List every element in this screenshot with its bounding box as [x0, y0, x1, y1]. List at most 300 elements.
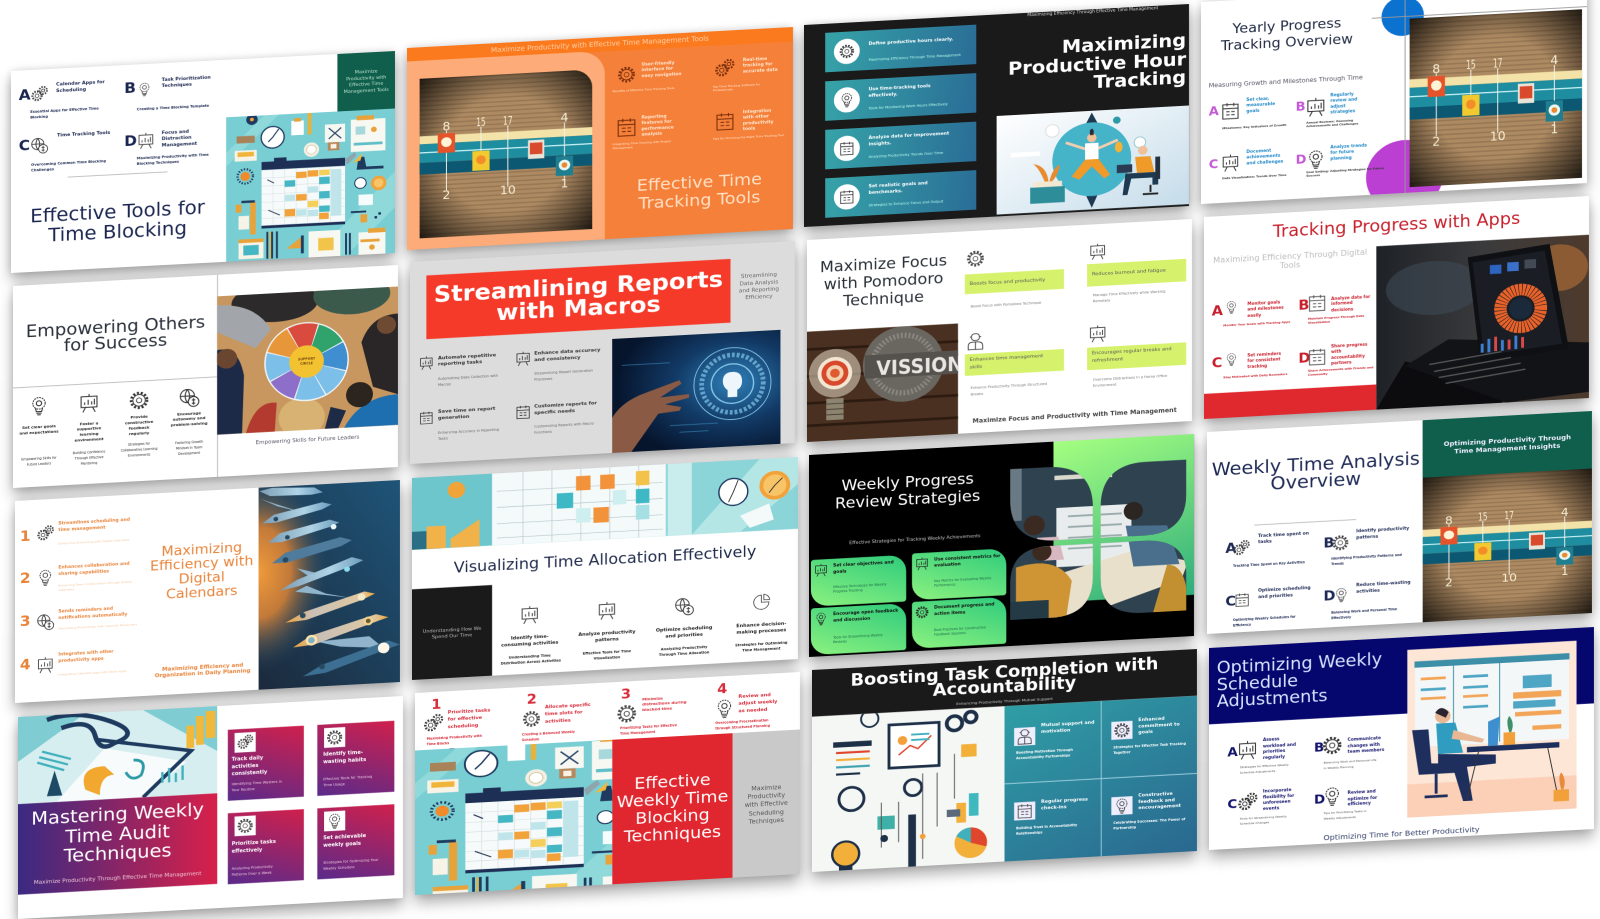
item 1: Enhancing Scheduling with Digital Calendars [58, 538, 129, 545]
item C: Schedule Changes [1240, 820, 1269, 825]
benefit 3: Enhances time management [970, 354, 1043, 363]
image: timeline [420, 70, 592, 239]
item B: Annual Reviews: Assessing [1306, 119, 1353, 125]
item A: A [19, 86, 31, 104]
side text: Efficiency [745, 294, 773, 301]
item A: easily [1247, 313, 1261, 318]
title block: Techniques [64, 839, 172, 866]
card 2 [825, 73, 976, 121]
title: Adjustments [1217, 686, 1328, 711]
item C: flexibility for [1263, 794, 1294, 800]
item 1: Macros [438, 382, 451, 387]
green block [1053, 434, 1194, 602]
card 2 [317, 721, 394, 796]
side text: and Reporting [739, 287, 779, 294]
cell 3: Relationships [1016, 830, 1043, 835]
item C: Overcoming Common Time Blocking [31, 159, 106, 167]
title: Weekly Progress [841, 469, 974, 495]
item D [1298, 342, 1380, 379]
subtitle: Measuring Growth and Milestones Through Time [1209, 74, 1363, 90]
panel: Empowering Others for Success [13, 265, 398, 488]
item 2: Enhancing Team Collaboration through Shared [58, 580, 132, 588]
item C: Data Visualization: Trends Over Time [1222, 173, 1286, 180]
item C [1225, 584, 1322, 625]
card 4: Feedback Sessions [934, 631, 966, 637]
item A: A [1225, 540, 1236, 557]
subtitle: Maximize Productivity with Effective Time Management Tools [491, 34, 709, 54]
item 4 [516, 401, 598, 435]
item 2: and consistency [534, 355, 580, 363]
cell 2: goals [1138, 730, 1153, 736]
item A: Set clear, [1246, 97, 1269, 103]
step 1: scheduling [448, 723, 478, 730]
cell 4 [1111, 789, 1193, 839]
card 3 [228, 809, 304, 884]
grey note block: with Effective [745, 800, 788, 809]
item 3 [20, 604, 145, 636]
item C: achievements [1246, 154, 1280, 161]
column 2: Through Effective [75, 455, 103, 460]
item 2 [20, 560, 145, 592]
image: calendar flat lay [226, 108, 395, 262]
step 4: adjust weekly [738, 699, 777, 707]
item B: Communicate [1348, 737, 1381, 743]
item 4 [20, 647, 145, 679]
card 4 [825, 170, 976, 218]
benefit 2: Manage Time Effectively while Working [1093, 289, 1165, 297]
card 2 [912, 548, 1006, 600]
tagline box [1423, 411, 1592, 478]
black label box [412, 585, 492, 680]
card 3: Reviews [833, 640, 847, 644]
item 2: Enhance data accuracy [534, 348, 600, 357]
header subtitle: Enhancing Productivity Through Mutual Support [956, 696, 1053, 706]
column 1: consuming activities [501, 640, 558, 648]
column 1: Understanding Time [509, 653, 551, 660]
card 4: Weekly Schedule [323, 865, 355, 871]
column 3: Environments [128, 453, 150, 458]
item A: Assess [1263, 738, 1280, 743]
card 4: benchmarks. [868, 188, 903, 196]
step 3: Prioritizing Tasks for Effective [620, 724, 677, 730]
grey note block: Scheduling [749, 808, 784, 817]
step 4: 4 [717, 680, 727, 697]
item B: B [124, 79, 136, 97]
card 3: effectively [232, 847, 262, 854]
cell 2: Together [1113, 750, 1131, 755]
cell 1: Accountability Partnerships [1016, 753, 1070, 760]
column 4: making processes [736, 627, 786, 635]
item A [1227, 736, 1309, 776]
item D: Blocking Techniques [137, 159, 179, 166]
panel: Maximizing Productive Hour Tracking [804, 4, 1189, 227]
item A: tasks [1258, 540, 1272, 545]
title: Visualizing Time Allocation Effectively [454, 543, 756, 576]
grey note block: Productivity [747, 792, 785, 801]
title: Tracking Progress with Apps [1273, 210, 1520, 242]
title: Calendars [166, 583, 237, 602]
item D: D [1298, 349, 1310, 366]
item 3: Management [613, 145, 633, 150]
column 4 [170, 388, 208, 456]
column 4: Enhance decision- [736, 621, 786, 629]
item A: and milestones [1247, 306, 1284, 313]
benefit 4: Encourages regular breaks and [1092, 347, 1172, 356]
cell 2: Strategies for Effective Task Tracking [1113, 742, 1186, 750]
item 1: interface for [641, 67, 673, 73]
cell 1: motivation [1041, 728, 1070, 735]
item D: Share Achievements with Friends and [1308, 366, 1373, 373]
column 1 [501, 602, 559, 668]
subtitle: Maximizing Efficiency Through Digital [1213, 249, 1367, 266]
item 3 [420, 406, 499, 441]
column 2: learning [80, 431, 98, 437]
side text: Streamlining [741, 273, 777, 280]
item A: Tracking Time Spent on Key Activities [1233, 560, 1305, 568]
item D: efficiency [1348, 802, 1371, 808]
card 4: Strategies for Optimizing Your [323, 857, 379, 865]
red title block: Effective [634, 770, 711, 793]
item A: regularly [1263, 755, 1285, 761]
column 1: and expectations [19, 429, 59, 436]
item 1: Streamlines scheduling and [58, 518, 130, 526]
item 4: Tips for Choosing the Right Time Tracking Tool [713, 133, 784, 141]
item 3: features for [641, 120, 672, 126]
title [820, 251, 947, 310]
item B: Maintain Progress Through Data [1308, 314, 1364, 321]
title banner: with Macros [496, 291, 661, 326]
card 3: Encourage open feedback [833, 609, 898, 617]
item 2: sharing capabilities [58, 570, 109, 577]
red title block: Weekly Time [617, 787, 728, 812]
item A: Scheduling [56, 87, 86, 94]
footer note: Organization in Daily Planning [155, 669, 251, 679]
cell 4: feedback and [1138, 797, 1175, 805]
item 2: Streamlining Report Generation [534, 368, 593, 376]
item A: Strategies for Effective Weekly [1240, 763, 1289, 769]
benefit 2: Remotely [1093, 298, 1110, 303]
cell 4: Celebrating Successes: The Power of [1113, 818, 1185, 825]
item 2: Top Time Tracking Software for [713, 83, 760, 89]
item D: Weekly Adjustments [1324, 815, 1356, 820]
benefit 2: Reduces burnout and fatigue [1092, 268, 1166, 277]
title [1217, 651, 1400, 711]
item D: Management [162, 141, 197, 148]
item B: Task Prioritization [162, 75, 211, 83]
item 3: Integrating Time Tracking with Project [613, 140, 671, 146]
item C: Efficiency [1233, 623, 1251, 627]
item B: informed [1331, 302, 1353, 307]
item A [18, 80, 105, 119]
column 2 [578, 598, 636, 664]
title [819, 469, 997, 513]
card 2: Key Metrics for Evaluating Weekly [934, 576, 991, 583]
item 1 [420, 352, 498, 387]
card 2: Performance [934, 583, 955, 587]
title: Maximizing [1062, 29, 1186, 58]
item 4: productivity apps [58, 657, 104, 664]
column 2: environment [75, 436, 104, 442]
card 1 [811, 555, 906, 607]
column 1: Distribution Across Activities [501, 657, 561, 665]
item 4: Integrates with other [58, 650, 114, 658]
item 2: Enhances collaboration and [58, 562, 130, 570]
benefit 3: skills [970, 364, 982, 370]
card 4 [317, 804, 394, 879]
subtitle: Effective Strategies for Tracking Weekly Achievements [849, 534, 981, 546]
item 4: productivity [743, 120, 774, 126]
card 2: Identify time- [323, 750, 363, 758]
cell 3: check-ins [1041, 804, 1067, 811]
red title block: Techniques [624, 822, 721, 847]
card 1: Define productive hours clearly. [868, 37, 953, 47]
column 3: Collaborative Learning [121, 447, 157, 453]
tagline box: Time Management Insights [1454, 441, 1560, 455]
step 2: time slots for [545, 710, 583, 717]
item C: unforeseen [1263, 800, 1291, 806]
title block: Mastering Weekly [31, 798, 204, 829]
item 1 [612, 60, 682, 93]
item C: C [1209, 157, 1218, 172]
item 3: analysis [641, 132, 662, 138]
column 2: Foster a [80, 421, 98, 426]
image: person at desk [1407, 641, 1577, 818]
card 3: Analyze data for improvement [868, 131, 949, 141]
cell 3: Regular progress [1041, 797, 1088, 805]
item C: C [1227, 797, 1237, 812]
item 3: Tasks [438, 436, 448, 441]
item B [1296, 92, 1358, 128]
item D [124, 129, 209, 166]
item A: A [1212, 302, 1223, 319]
navy header [1209, 627, 1594, 724]
panel: Streamlining Reports with Macros [410, 241, 795, 464]
benefit 3: Breaks [971, 391, 983, 396]
card 1: Identifying Time Wasters in [232, 779, 282, 786]
item 1: Benefits of Effective Time Tracking Tools [613, 86, 674, 93]
item 3 [612, 114, 674, 150]
step 2: activities [545, 718, 571, 725]
item B [1314, 731, 1396, 772]
panel tagline: Management Tools [344, 87, 389, 95]
item A: Monitor Your Goals with Tracking Apps [1223, 320, 1290, 327]
step 2: Schedule [522, 737, 539, 742]
title: Overview [1270, 467, 1361, 494]
card 2: evaluation [934, 563, 961, 569]
column 2: Building Confidence [73, 450, 105, 455]
subtitle: Maximizing Efficiency Through Effective Time Management [1027, 7, 1158, 18]
image: timeline [1423, 468, 1592, 622]
item A: workload and [1263, 743, 1296, 749]
title: Optimizing Weekly [1217, 650, 1382, 678]
grey note block [733, 729, 800, 878]
card 1: goals [833, 570, 847, 575]
item A: Schedule Adjustments [1240, 769, 1275, 774]
card 4: Set realistic goals and [868, 181, 928, 189]
card 4: Best Practices for Constructive [934, 626, 986, 632]
item A: A [1209, 104, 1219, 119]
benefit 3: Enhance Productivity Through Structured [971, 381, 1047, 390]
item B: team members [1348, 748, 1384, 755]
column 2: patterns [595, 636, 619, 643]
card 3: Tools for Streamlining Weekly [833, 633, 883, 640]
item 3: Save time on report [438, 406, 495, 415]
title block: Time Audit [65, 820, 170, 847]
item 2: tracking for [743, 63, 773, 69]
cell 4: Constructive [1138, 791, 1173, 799]
item 4: Functions [534, 429, 552, 435]
card 4: Strategies to Enhance Focus and Output [868, 199, 943, 207]
item B: strategies [1330, 109, 1355, 115]
title: Tracking [1093, 66, 1186, 93]
card 1: Progress Tracking [833, 589, 863, 594]
column 4: Strategies for Optimizing [735, 640, 788, 647]
benefit 4: Environment [1093, 382, 1116, 388]
image: isometric audit [18, 706, 217, 804]
benefit 1: Boosts focus and productivity [970, 277, 1045, 287]
side text [739, 272, 779, 301]
peach frame [407, 51, 605, 250]
benefit 3 [964, 333, 1064, 396]
image: bulb and vision [807, 323, 958, 442]
benefit 2 [1087, 244, 1186, 303]
step 4: Review and [738, 692, 771, 700]
card 1: Your Routine [232, 787, 255, 792]
cell 3: Building Trust in Accountability [1016, 823, 1077, 830]
item C: Challenges [31, 167, 54, 172]
item 1: time management [58, 526, 105, 533]
step 4 [713, 677, 798, 731]
card 4: action items [934, 611, 965, 617]
cell 2 [1111, 714, 1193, 763]
benefit 1: Boost Focus with Pomodoro Technique [971, 300, 1041, 308]
card 1: Effective Techniques for Weekly [833, 583, 886, 589]
title: Effective Time [637, 170, 762, 195]
item D: Balancing Work and Personal Time [1331, 608, 1397, 615]
header title: Boosting Task Completion with [851, 655, 1158, 690]
item C: events [1263, 807, 1279, 812]
title: Yearly Progress [1232, 15, 1341, 37]
item 2 [516, 348, 600, 382]
title [26, 313, 205, 356]
cell 3 [1014, 795, 1096, 844]
block subtitle: Maximize Productivity Through Effective Time Management [34, 871, 201, 886]
item 2: accurate data [743, 68, 778, 74]
item D: accountability [1331, 354, 1365, 361]
item C: C [19, 136, 30, 154]
item A: goals [1246, 109, 1259, 114]
item A [1225, 530, 1322, 571]
item D: for future [1330, 150, 1354, 156]
card 4: Document progress and [934, 603, 994, 611]
item C: Optimize scheduling [1258, 586, 1311, 594]
title: with Pomodoro [824, 269, 943, 293]
step 3: distractions during [642, 701, 687, 708]
item B: Identifying Productivity Patterns and [1331, 553, 1402, 561]
column 4: problem-solving [171, 421, 208, 427]
item C [1209, 148, 1286, 180]
item 4: specific needs [534, 408, 575, 416]
column 4: Encourage [177, 410, 201, 416]
item C [19, 130, 110, 172]
image: person balancing time [996, 106, 1189, 215]
title [1220, 15, 1353, 53]
item C: Document [1246, 149, 1271, 155]
subtitle: Tools [1280, 261, 1300, 271]
step 2: Allocate specific [545, 702, 591, 710]
item B: B [1323, 535, 1334, 551]
card 4 [912, 597, 1006, 649]
item 3: generation [438, 414, 469, 421]
item A [1212, 295, 1294, 332]
title: Digital [179, 569, 225, 587]
card 3: and discussion [833, 617, 870, 623]
panel: Effective Time Tracking Tools [407, 27, 793, 250]
item 3: notifications automatically [58, 613, 127, 621]
item C: Tools for Streamlining Weekly [1240, 814, 1287, 821]
column 3: Analyzing Productivity [661, 644, 707, 651]
item C: Time Tracking Tools [57, 130, 110, 139]
item B [1298, 290, 1380, 327]
column 3: and priorities [665, 632, 703, 639]
column 2: Mentoring [81, 461, 97, 465]
item 4: tools [743, 127, 755, 132]
footer note [150, 662, 256, 680]
item C: tracking [1247, 364, 1267, 370]
column 3 [120, 392, 158, 458]
item A: A [1227, 745, 1238, 760]
item 4: Customizing Reports with Macro [534, 421, 594, 429]
card 1: Set clear objectives and [833, 561, 894, 569]
item C: for consistent [1247, 358, 1280, 364]
item B: adjust [1330, 104, 1346, 110]
black label box: Understanding How We [423, 626, 481, 635]
item B: Achievements and Challenges [1306, 122, 1358, 128]
title: Tracking Tools [638, 188, 760, 213]
item 1: User-friendly [641, 61, 674, 68]
card 2: Use time-tracking tools [868, 84, 931, 92]
image: group around support wheel: CIRCLE [300, 361, 313, 366]
image: hand and digital head [612, 330, 781, 453]
item 3: Enhancing Accuracy in Reporting [438, 427, 499, 435]
item A: Milestones: Key Indicators of Growth [1222, 123, 1286, 130]
title: Time Blocking [48, 217, 187, 246]
title: Maximizing [161, 540, 242, 559]
item D: Focus and [162, 129, 189, 136]
item C: Stay Motivated with Daily Reminders [1223, 372, 1287, 379]
item C [1212, 347, 1294, 384]
right panel [1004, 696, 1197, 862]
column 1: Identify time- [511, 634, 549, 641]
card 2: Tools for Monitoring Work Hours Effectively [868, 102, 948, 110]
item A [1208, 96, 1286, 130]
card 1: activities [232, 763, 259, 770]
footer note: Maximizing Efficiency and [162, 663, 243, 673]
item D: optimize for [1348, 796, 1377, 802]
title banner [426, 259, 731, 339]
header title [812, 649, 1197, 717]
item B: review and [1330, 98, 1357, 104]
item C: Set reminders [1247, 352, 1281, 358]
item 4: Integrating Calendar Apps with Other Apps [58, 669, 127, 676]
item B [1323, 525, 1420, 566]
column 2: Effective Tools for Time [583, 648, 631, 655]
item B [124, 75, 211, 111]
item D: Review and [1348, 790, 1376, 796]
title: Productive Hour [1008, 48, 1186, 79]
step 3 [615, 682, 708, 736]
image: calendar banner [412, 457, 798, 550]
